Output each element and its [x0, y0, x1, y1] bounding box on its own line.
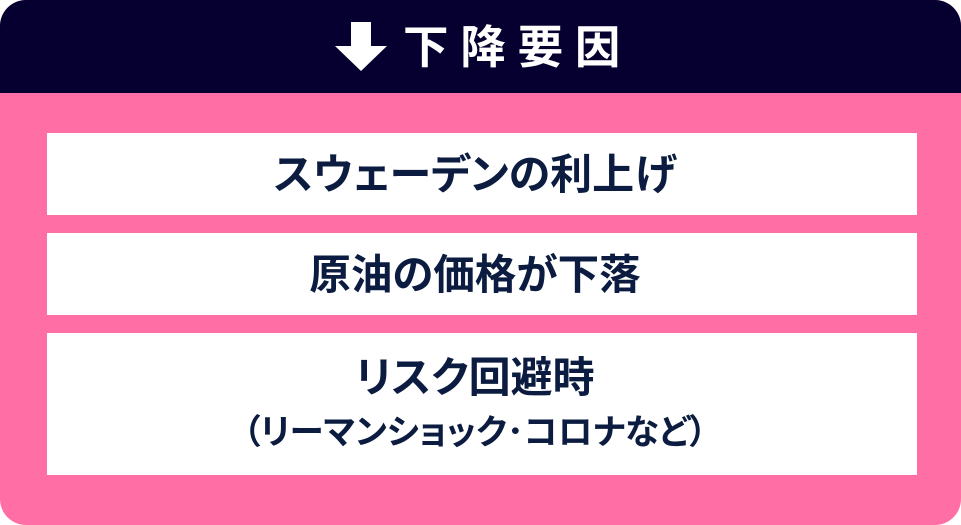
factor text 2: 原油の価格が下落	[309, 251, 641, 298]
factor text 3: リスク回避時	[355, 354, 595, 401]
factor text 1: スウェーデンの利上げ	[274, 151, 676, 198]
title: 下降要因	[403, 22, 632, 73]
factor: Swedish rate hike	[47, 133, 917, 215]
header band	[0, 0, 961, 93]
factor: risk aversion	[47, 333, 917, 475]
factor: oil price decline	[47, 233, 917, 315]
icon: down arrow	[335, 22, 387, 71]
factor note: （リーマンショック･コロナなど）	[243, 414, 707, 452]
